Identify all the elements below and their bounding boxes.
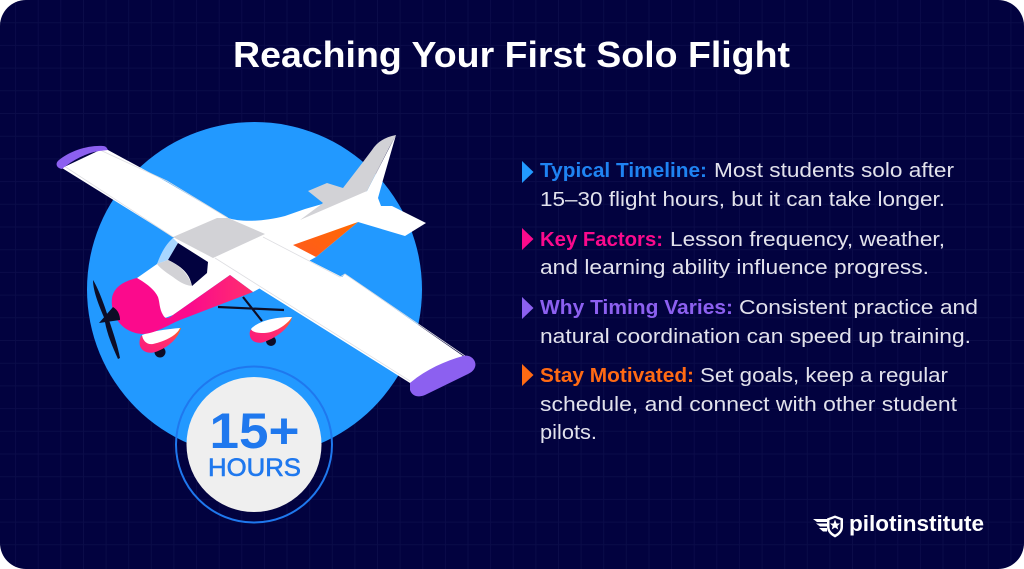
bullet: why timing varies: Consistent practice and — [739, 296, 978, 319]
bullet: stay motivated: Set goals, keep a regular — [700, 364, 948, 387]
icon: grey wing root — [173, 218, 265, 258]
badge label: HOURS — [208, 454, 301, 482]
icon: left wheel pant — [139, 328, 181, 353]
bullet: key factors: Lesson frequency, weather, — [670, 228, 945, 251]
bullet: stay motivated: pilots. — [540, 421, 597, 444]
icon: left purple wing tip — [57, 146, 108, 169]
bullet: key factors: Key Factors: — [540, 228, 663, 251]
logo: pilot institute: pilotinstitute — [849, 511, 984, 536]
badge number: 15+ — [210, 403, 300, 459]
icon: side window — [168, 243, 208, 286]
bullet: typical timeline: Most students solo after — [714, 159, 954, 182]
airplane illustration — [57, 135, 475, 396]
title: Reaching Your First Solo Flight — [233, 34, 790, 75]
bullet: why timing varies: natural coordination can speed up training. — [540, 325, 971, 348]
blue circle backdrop — [87, 122, 422, 457]
bullet: key factors — [522, 228, 945, 279]
icon: grey door — [157, 260, 192, 286]
bullet: why timing varies — [522, 296, 978, 348]
bullet: typical timeline — [522, 159, 954, 211]
bullet: typical timeline: Typical Timeline: — [540, 159, 707, 182]
bullet: key factors: and learning ability influence progress. — [540, 256, 929, 279]
bullet: stay motivated: Stay Motivated: — [540, 364, 694, 387]
icon: right wheel pant — [250, 317, 292, 343]
icon: wheels — [154, 336, 276, 358]
icon: rear fuselage and horizontal stabilizer — [137, 135, 426, 318]
bullet: stay motivated — [522, 364, 957, 444]
icon: landing gear struts — [218, 297, 284, 321]
bullet: why timing varies: Why Timing Varies: — [540, 296, 733, 319]
badge: 15+ hours — [176, 366, 332, 522]
icon: right purple wing tip — [410, 356, 475, 396]
bullet: stay motivated: schedule, and connect with other student — [540, 393, 957, 416]
icon: grey tail fin — [300, 135, 396, 220]
icon: orange belly stripe — [293, 222, 358, 257]
icon: windshield — [157, 238, 178, 264]
icon: propeller — [93, 280, 120, 359]
icon: pink nose and fuselage underside — [112, 275, 253, 334]
icon: main wing — [62, 150, 463, 383]
bullet list — [522, 159, 978, 444]
bullet: typical timeline: 15–30 flight hours, but it can take longer. — [540, 188, 945, 211]
icon: winged shield — [813, 516, 843, 538]
